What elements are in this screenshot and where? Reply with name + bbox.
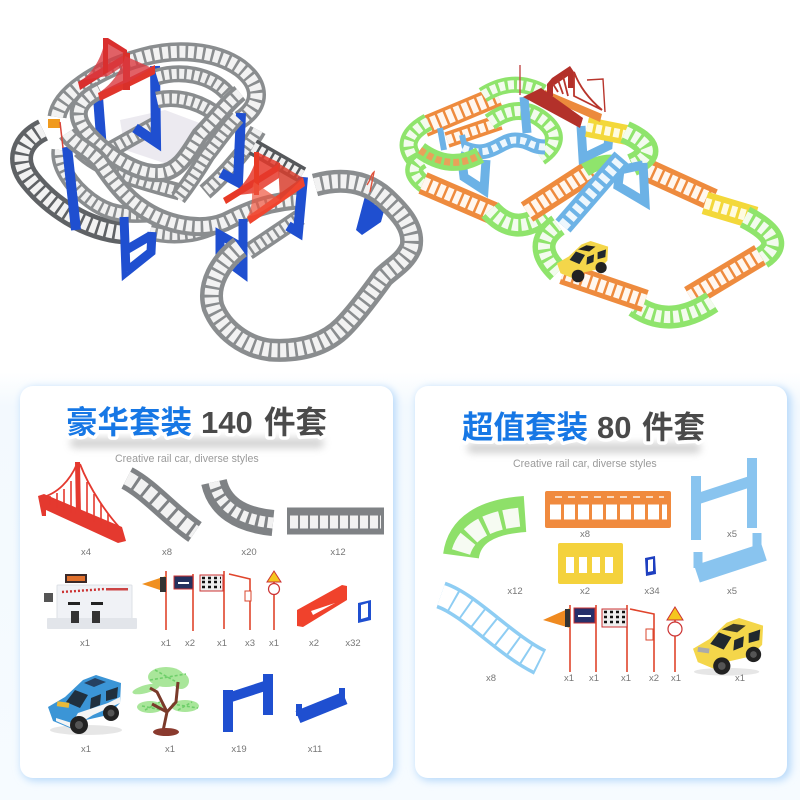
photo: colourful value track set xyxy=(409,65,773,317)
quantity labels right: x1 xyxy=(735,673,745,684)
S ramp tracks xyxy=(67,90,305,227)
part: blue tall pier xyxy=(228,674,268,732)
heading: deluxe set 140 pieces: 件套 xyxy=(264,397,327,443)
upper tracks xyxy=(409,85,554,163)
yellow and green top right tracks xyxy=(587,127,647,165)
part: red barrier xyxy=(297,585,347,627)
part: triangular flag sign xyxy=(142,571,166,630)
red suspension bridge A xyxy=(78,38,155,101)
quantity labels left: x2 xyxy=(309,638,319,649)
part: sign warnings xyxy=(667,607,683,672)
quantity labels left: x32 xyxy=(345,638,361,649)
panel: value set xyxy=(415,386,791,781)
centre floor shadow xyxy=(120,110,205,165)
part: gray straight xyxy=(287,521,384,522)
red suspension bridge B xyxy=(223,152,305,224)
part: checkered flag xyxy=(200,571,224,629)
small flag at right xyxy=(367,172,374,192)
upper green spiral xyxy=(420,150,480,162)
part: gray ramp xyxy=(127,478,195,532)
heading: deluxe set 140 pieces xyxy=(66,397,327,448)
quantity labels left: x12 xyxy=(330,547,346,558)
quantity labels right: x8 xyxy=(486,673,496,684)
top spiral loop tracks xyxy=(57,52,256,192)
part: blue low pier xyxy=(298,688,345,717)
blue S ramp xyxy=(463,140,545,152)
pier: front right tower xyxy=(220,219,243,273)
big lower oval track xyxy=(212,181,412,350)
yellow car on track xyxy=(557,241,608,282)
part: sign traffic light xyxy=(630,609,654,672)
pier: left tall tower xyxy=(67,147,76,230)
heading: value set 80 pieces xyxy=(462,402,705,453)
part: blue frame xyxy=(358,600,371,623)
heading: deluxe set 140 pieces: 豪华套装 xyxy=(66,397,192,443)
part: sign triangular flag xyxy=(543,605,570,672)
subtitle right: Creative rail car, diverse styles xyxy=(513,458,657,470)
quantity labels right: x2 xyxy=(580,586,590,597)
part: warning signs xyxy=(267,571,281,630)
quantity labels right: x5 xyxy=(727,529,737,540)
heading: value set 80 pieces: 80 xyxy=(597,410,631,445)
part: light blue ramp xyxy=(441,595,540,662)
pier: far right tower xyxy=(288,177,303,232)
pier: upper tower xyxy=(98,97,102,150)
quantity labels right: x1 xyxy=(564,673,574,684)
quantity labels left: x1 xyxy=(161,638,171,649)
quantity labels left: x3 xyxy=(245,638,255,649)
blue ramp xyxy=(563,158,622,226)
quantity labels left: x2 xyxy=(185,638,195,649)
quantity labels left: x1 xyxy=(165,744,175,755)
quantity labels right: x1 xyxy=(621,673,631,684)
heading: value set 80 pieces: 件套 xyxy=(642,402,705,448)
pier: small end tower xyxy=(356,196,387,235)
part: light blue tall pier xyxy=(696,458,752,540)
quantity labels left: x1 xyxy=(217,638,227,649)
lower back tracks xyxy=(110,125,258,235)
lowest far left track xyxy=(22,130,125,233)
quantity labels right: x12 xyxy=(507,586,523,597)
quantity labels right: x1 xyxy=(671,673,681,684)
part: blue frame small xyxy=(645,556,656,576)
panel: deluxe set xyxy=(20,386,396,781)
part: yellow car xyxy=(693,618,763,676)
lower left tracks xyxy=(414,160,615,225)
quantity labels right: x34 xyxy=(644,586,660,597)
quantity labels right: x2 xyxy=(649,673,659,684)
quantity labels right: x8 xyxy=(580,529,590,540)
inner low track xyxy=(60,150,150,214)
part: yellow short track xyxy=(558,543,623,584)
quantity labels left: x11 xyxy=(308,744,322,755)
part: sign arrow xyxy=(574,605,596,672)
quantity labels left xyxy=(80,547,361,755)
part: gray curve xyxy=(214,482,273,523)
pier: front bottom tower xyxy=(124,217,152,272)
pier: back tower xyxy=(135,66,156,142)
heading: value set 80 pieces: 超值套装 xyxy=(462,402,588,448)
quantity labels right: x5 xyxy=(727,586,737,597)
part: blue car xyxy=(48,675,122,735)
part: tree xyxy=(131,667,199,736)
part: light blue low pier xyxy=(697,533,764,574)
photo: grey and blue deluxe track set xyxy=(22,38,412,350)
warning flag with chevrons xyxy=(48,119,63,148)
part: arrow sign xyxy=(174,574,193,631)
right side tracks xyxy=(544,170,773,317)
blue piers back xyxy=(440,97,609,190)
quantity labels left: x4 xyxy=(81,547,91,558)
quantity labels left: x19 xyxy=(231,744,247,755)
part: orange straight xyxy=(545,491,671,528)
part: green curve xyxy=(461,514,525,556)
quantity labels left: x1 xyxy=(269,638,279,649)
part: red bridge xyxy=(38,462,126,543)
dark red bridge xyxy=(520,65,605,128)
subtitle left: Creative rail car, diverse styles xyxy=(115,453,259,465)
pier: right mid tower xyxy=(221,113,241,182)
quantity labels right: x1 xyxy=(589,673,599,684)
blue pier front xyxy=(618,163,645,202)
quantity labels left: x8 xyxy=(162,547,172,558)
heading: deluxe set 140 pieces: 140 xyxy=(201,405,253,440)
quantity labels left: x1 xyxy=(80,638,90,649)
pale band behind panels xyxy=(0,372,800,800)
lower levels right xyxy=(248,147,302,252)
part: sign checkered flag xyxy=(602,605,627,672)
part: traffic light sign xyxy=(229,574,251,630)
quantity labels left: x1 xyxy=(81,744,91,755)
part: gas station xyxy=(44,574,137,629)
quantity labels right xyxy=(486,529,745,684)
quantity labels left: x20 xyxy=(241,547,257,558)
